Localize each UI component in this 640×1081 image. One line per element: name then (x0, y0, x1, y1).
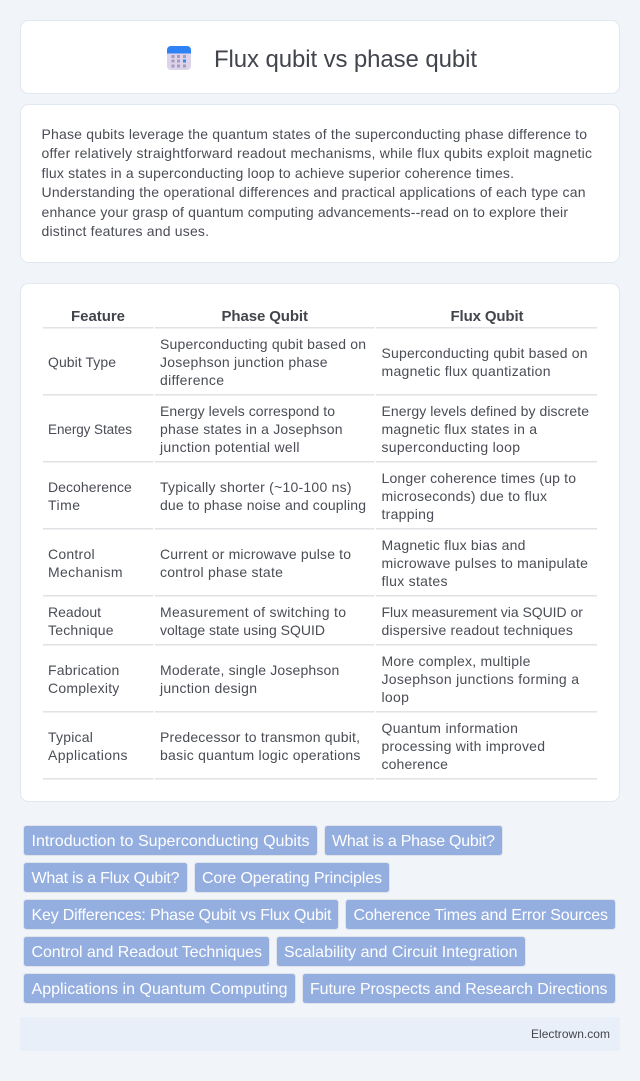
row: Control Mechanism: flux states (382, 573, 448, 589)
row: Energy States: superconducting loop (382, 439, 520, 455)
row: Energy States: phase states in a Josephson (160, 421, 342, 437)
title: Flux qubit vs phase qubit (214, 46, 477, 73)
tag: What is a Flux Qubit: What is a Flux Qubit? (32, 870, 180, 887)
row: Readout Technique: Technique (48, 622, 114, 638)
tag: What is a Phase Qubit (324, 826, 502, 856)
row: Control Mechanism: Magnetic flux bias and (382, 537, 525, 553)
row: Fabrication Complexity: Josephson junctions forming a (382, 671, 579, 687)
row: Typical Applications: basic quantum logic operations (160, 747, 360, 763)
intro paragraph: flux states in a superconducting loop to achieve superior coherence times. (42, 165, 514, 181)
tag: Future Prospects (302, 974, 616, 1004)
row: Readout Technique: voltage state using SQUID (160, 622, 325, 638)
panel: comparison table (20, 284, 620, 802)
icon: calendar grid (167, 46, 191, 70)
row: Fabrication Complexity: More complex, multiple (382, 653, 531, 669)
tag: Core Operating Principles (194, 862, 390, 892)
row: Readout Technique (48, 604, 583, 638)
row: Typical Applications: Predecessor to transmon qubit, (160, 729, 360, 745)
header panel (20, 20, 620, 94)
tag: Scalability: Scalability and Circuit Integration (284, 944, 518, 961)
tag: Coherence Times (346, 900, 616, 930)
row: Qubit Type: magnetic flux quantization (382, 363, 550, 379)
row: Typical Applications: Applications (48, 747, 128, 763)
row: Readout Technique: dispersive readout techniques (382, 622, 573, 638)
row: Control Mechanism: Control (48, 546, 95, 562)
row: Typical Applications: processing with improved (382, 738, 545, 754)
row: Readout Technique: Measurement of switching to (160, 604, 346, 620)
row: Decoherence Time: microseconds) due to flux (382, 488, 547, 504)
row: Qubit Type: Josephson junction phase (160, 354, 328, 370)
tag: Coherence Times: Coherence Times and Error Sources (354, 907, 608, 924)
intro paragraph: distinct features and uses. (42, 223, 209, 239)
tag: Scalability (276, 936, 526, 966)
tag: Applications (24, 974, 296, 1004)
tag: Introduction (24, 826, 318, 856)
row: Decoherence Time: Time (48, 497, 80, 513)
row: Decoherence Time (48, 470, 576, 522)
tag: Control and Readout (24, 936, 270, 966)
tag: What is a Phase Qubit: What is a Phase Qubit? (332, 833, 495, 850)
row: Control Mechanism: control phase state (160, 564, 283, 580)
row: Typical Applications: Typical (48, 729, 93, 745)
row: Energy States (48, 403, 589, 455)
row: Fabrication Complexity: Moderate, single Josephson (160, 662, 339, 678)
tag: Core Operating Principles: Core Operating Principles (202, 870, 382, 887)
row: Fabrication Complexity (48, 653, 579, 705)
row: Control Mechanism: Current or microwave pulse to (160, 546, 351, 562)
intro paragraph: Phase qubits leverage the quantum states of the superconducting phase difference to (42, 126, 587, 142)
row: Typical Applications: coherence (382, 756, 448, 772)
panel: introduction (20, 104, 620, 262)
table header row (71, 308, 524, 325)
intro paragraph: offer relatively straightforward readout mechanisms, while flux qubits exploit magnetic (42, 145, 592, 161)
tag: Key Differences (24, 900, 338, 930)
tag: What is a Flux Qubit (24, 862, 188, 892)
row: Qubit Type: difference (160, 372, 224, 388)
row: Typical Applications: Quantum information (382, 720, 518, 736)
row: Decoherence Time: Typically shorter (~10-100 ns) (160, 479, 352, 495)
row: Decoherence Time: Decoherence (48, 479, 132, 495)
tag: Key Differences: Key Differences: Phase Qubit vs Flux Qubit (32, 907, 332, 924)
row: Control Mechanism: Mechanism (48, 564, 122, 580)
tag: Future Prospects: Future Prospects and Research Directions (310, 981, 608, 998)
row: Typical Applications (48, 720, 545, 772)
row: Qubit Type: Superconducting qubit based on (382, 345, 588, 361)
row: Fabrication Complexity: Complexity (48, 680, 119, 696)
row: Readout Technique: Flux measurement via SQUID or (382, 604, 583, 620)
row: Energy States: Energy levels correspond to (160, 403, 335, 419)
table header row: Feature (71, 308, 125, 325)
intro paragraph: enhance your grasp of quantum computing advancements--read on to explore their (42, 204, 568, 220)
row: Energy States: Energy States (48, 422, 132, 437)
footer (20, 1017, 620, 1051)
table header row: Flux Qubit (450, 308, 524, 325)
row: Energy States: magnetic flux states in a (382, 421, 537, 437)
tag: Introduction: Introduction to Superconducting Qubits (32, 833, 310, 850)
row: Decoherence Time: trapping (382, 506, 434, 522)
row: Control Mechanism (48, 537, 588, 589)
row: Control Mechanism: microwave pulses to manipulate (382, 555, 588, 571)
row: Qubit Type: Superconducting qubit based on (160, 336, 366, 352)
footer brand text: Electrown.com (531, 1027, 610, 1041)
intro paragraph (42, 126, 592, 239)
row: Energy States: junction potential well (159, 439, 300, 455)
row: Decoherence Time: Longer coherence times (up to (382, 470, 576, 486)
topic tags (24, 826, 616, 1004)
row: Energy States: Energy levels defined by discrete (382, 403, 589, 419)
row: Readout Technique: Readout (48, 604, 101, 620)
row: Qubit Type: Qubit Type (48, 354, 116, 370)
intro paragraph: Understanding the operational differences and practical applications of each type can (42, 184, 586, 200)
tag: Applications: Applications in Quantum Computing (32, 981, 288, 998)
row: Fabrication Complexity: loop (382, 689, 409, 705)
row: Fabrication Complexity: Fabrication (48, 662, 119, 678)
row: Decoherence Time: due to phase noise and coupling (160, 497, 366, 513)
row: Qubit Type (48, 336, 588, 388)
tag: Control and Readout: Control and Readout Techniques (32, 944, 262, 961)
row: Fabrication Complexity: junction design (159, 680, 257, 696)
table header row: Phase Qubit (222, 308, 308, 325)
